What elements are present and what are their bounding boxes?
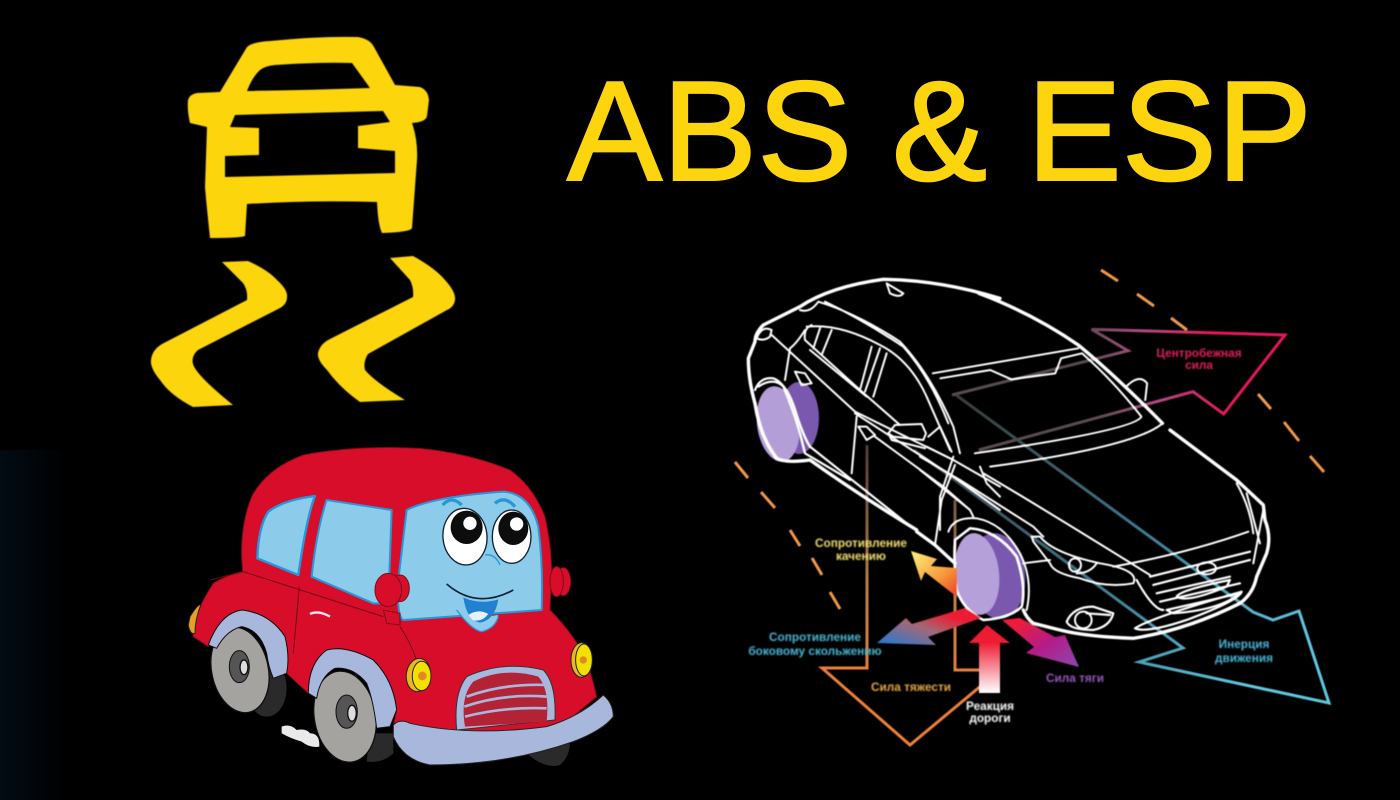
label: centrifugal force: Центробежная (1156, 346, 1242, 360)
door window (312, 500, 392, 603)
label: lateral slip resistance: боковому скольжению (748, 644, 882, 658)
diagram: vehicle dynamics on the car (735, 270, 1329, 745)
label: gravity: Сила тяжести (871, 680, 951, 694)
front wheel (307, 666, 393, 767)
label: centrifugal force: сила (1185, 358, 1213, 372)
car outline (748, 279, 1269, 638)
headlights (188, 605, 592, 693)
front wheel (951, 530, 1029, 622)
label: traction: Сила тяги (1046, 671, 1104, 685)
arrow: lateral slip resistance (877, 608, 981, 645)
label: lateral slip resistance: Сопротивление (769, 630, 861, 644)
arrow: rolling resistance (911, 551, 957, 597)
arrow: gravity (822, 445, 982, 745)
rear wheel (752, 382, 819, 465)
car body (193, 447, 597, 733)
rear wheel (203, 622, 287, 718)
dashed path lines (735, 270, 1324, 609)
arrow: road reaction (969, 625, 1010, 693)
mouth and chin (447, 584, 513, 632)
wheel arches (208, 610, 288, 678)
grille (456, 666, 555, 730)
rear side window (257, 496, 315, 575)
arrow: traction (1002, 618, 1079, 667)
label: rolling resistance: качению (836, 549, 886, 563)
eyebrows (443, 500, 515, 507)
force labels (748, 346, 1273, 725)
label: inertia: Инерция (1219, 637, 1269, 651)
side mirror (375, 573, 409, 625)
nose (485, 555, 500, 565)
eyes (441, 507, 531, 567)
arrow: inertia (914, 395, 1329, 703)
label: inertia: движения (1215, 651, 1273, 665)
windscreen face (398, 492, 542, 620)
arrow: centrifugal force (952, 329, 1285, 450)
label: rolling resistance: Сопротивление (815, 536, 907, 550)
label: road reaction: Реакция (966, 699, 1014, 713)
far wheel (523, 742, 570, 766)
title: ABS & ESP (567, 52, 1312, 211)
door lines (210, 572, 418, 667)
bumper (393, 695, 613, 765)
exhaust smoke (282, 726, 319, 747)
illustration: cartoon red car (188, 447, 613, 767)
label: road reaction: дороги (969, 711, 1011, 725)
door handle (310, 612, 330, 617)
icon: skidding car warning light (151, 37, 455, 407)
right mirror (550, 567, 571, 597)
